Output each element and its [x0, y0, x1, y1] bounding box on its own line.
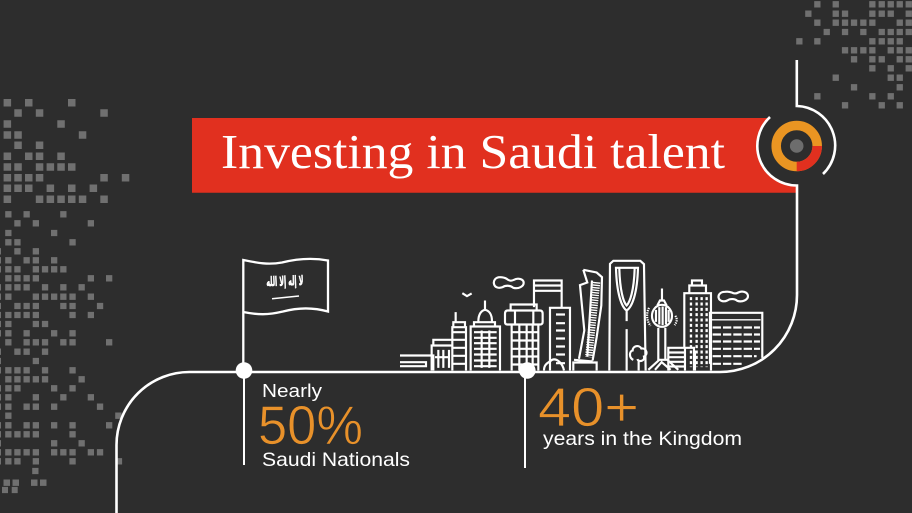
building: narrow tower [452, 312, 466, 370]
kingdom tower [609, 261, 646, 370]
flag inscription: لا إله إلا الله [266, 275, 304, 290]
cloud left [494, 277, 524, 288]
value: 50%: 50% [258, 394, 363, 456]
cloud right [719, 292, 748, 301]
building: low block [400, 355, 433, 370]
building: crowned tower [505, 304, 543, 370]
building: rear tower [534, 280, 562, 307]
building: domed tower [471, 300, 500, 370]
title: Investing in Saudi talent [221, 124, 725, 179]
label: Saudi Nationals: Saudi Nationals [262, 449, 410, 471]
stat: 40+ years in the Kingdom [538, 376, 742, 450]
value: 40+: 40+ [538, 376, 639, 438]
flag sword [272, 296, 299, 299]
building: stepped block [432, 340, 452, 370]
title banner [192, 118, 797, 193]
tree [630, 346, 646, 370]
pixel pattern: upper left [4, 103, 129, 199]
twisted tower [573, 270, 602, 370]
logo: orange and red ring [776, 126, 817, 166]
label: years in the Kingdom: years in the Kingdom [543, 428, 742, 450]
node: first milestone [236, 362, 252, 379]
radio tower [648, 288, 678, 370]
timeline path [116, 60, 835, 513]
stat: 50 percent Saudi Nationals [258, 380, 410, 471]
label: Nearly: Nearly [262, 380, 323, 401]
bird [462, 293, 472, 296]
pixel pattern: top right [796, 4, 912, 105]
twisted tower facade [589, 282, 597, 357]
flag [243, 259, 328, 371]
building: slim tower [550, 308, 570, 370]
pixel pattern: lower left [0, 214, 122, 490]
building: wide block [710, 313, 762, 364]
node: second milestone [519, 362, 536, 379]
building: tall tower [684, 280, 711, 370]
radio tower sphere [647, 305, 677, 327]
skyline [400, 261, 762, 370]
building: side block [668, 348, 694, 370]
bush [544, 359, 564, 370]
